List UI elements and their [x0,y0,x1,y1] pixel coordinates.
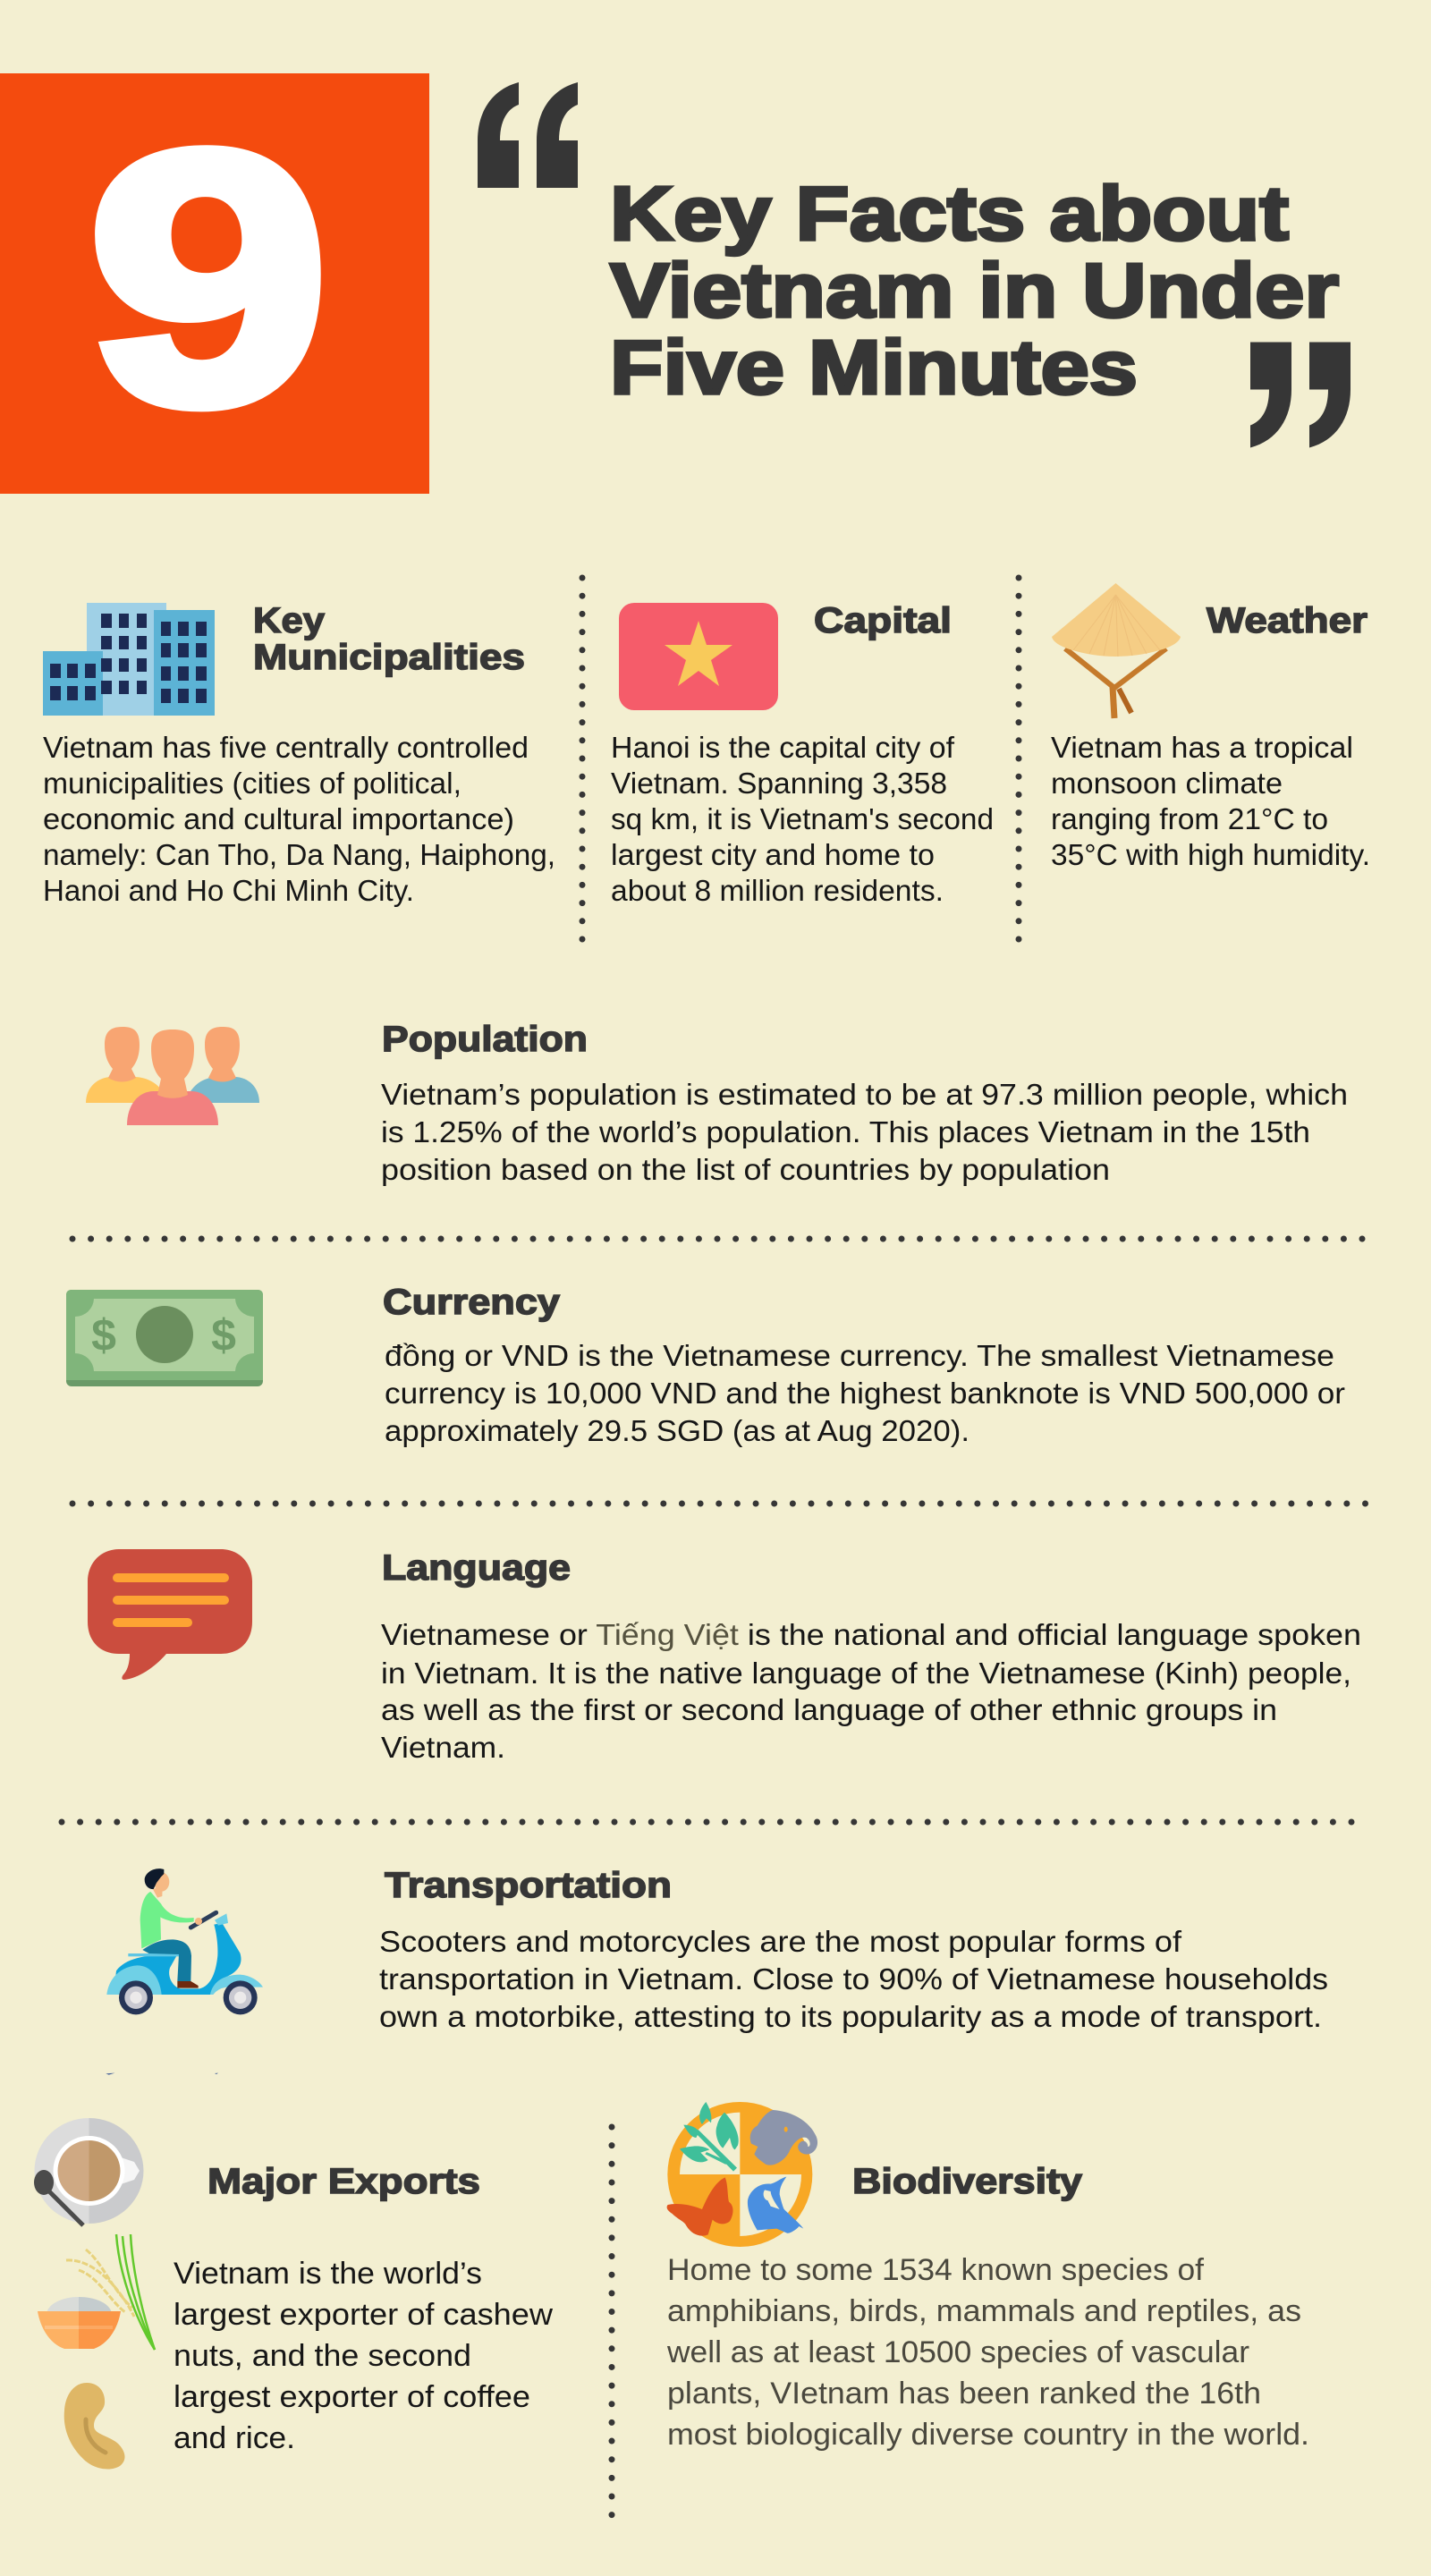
text: municipalities body: Vietnam has five centrally controlled [43,731,529,764]
icon: plant [680,2102,739,2172]
text: language body: Vietnam. [381,1731,505,1764]
text: exports body: largest exporter of cashew [174,2298,553,2332]
icon: dollar signs: $ [211,1310,236,1360]
icon: dollar signs: $ [91,1310,116,1360]
title: Five Minutes [610,326,1138,411]
icon: opening quote mark [478,82,578,188]
icon: closing quote mark [1250,342,1351,447]
text: transportation body: transportation in Vietnam. Close to 90% of Vietnamese households [379,1962,1328,1996]
text: exports body: Vietnam is the world’s [174,2257,482,2291]
panel: number nine block [0,73,429,494]
icon: banknote [66,1290,263,1386]
icon: butterfly [667,2177,733,2236]
panel: number nine block: 9 [88,79,329,479]
icon: rice bowl [38,2234,155,2350]
icon: Vietnam flag [619,603,778,710]
panel: weather [1051,583,1370,871]
text: municipalities body: economic and cultural importance) [43,802,514,835]
text: population body [381,1078,1348,1186]
title: Vietnam in Under [610,249,1339,334]
text: weather body: 35°C with high humidity. [1051,838,1370,871]
title [610,172,1339,411]
text: currency body: đồng or VND is the Vietnamese currency. The smallest Vietnamese [385,1339,1334,1372]
heading: key municipalities [253,601,525,677]
heading: transportation: Transportation [385,1866,672,1905]
heading: capital: Capital [814,601,952,640]
text: population body: is 1.25% of the world’s population. This places Vietnam in the 15th [381,1115,1310,1148]
panel: major exports [34,2118,553,2469]
text: transportation body: Scooters and motorcycles are the most popular forms of [379,1925,1182,1958]
text: exports body: nuts, and the second [174,2339,471,2373]
icon: speech bubble [88,1549,252,1680]
heading: language: Language [382,1548,571,1588]
text: biodiversity body: amphibians, birds, mammals and reptiles, as [667,2294,1301,2328]
icon: dolphin [748,2177,803,2233]
heading: population: Population [382,1020,588,1059]
icon: people [86,1027,259,1125]
text: transportation body: own a motorbike, attesting to its popularity as a mode of transport. [379,2000,1322,2033]
heading: key municipalities: Key [253,601,326,640]
icon: cashew [64,2383,125,2469]
text: biodiversity body: most biologically diverse country in the world. [667,2418,1309,2452]
heading: key municipalities: Municipalities [253,638,525,677]
heading: major exports: Major Exports [207,2162,480,2201]
text: municipalities body: municipalities (cities of political, [43,767,461,800]
text: population body: position based on the list of countries by population [381,1153,1110,1186]
text: weather body: monsoon climate [1051,767,1283,800]
title: Key Facts about [610,172,1289,257]
panel: currency [66,1283,1345,1447]
text: currency body: approximately 29.5 SGD (as at Aug 2020). [385,1414,970,1447]
heading: currency: Currency [383,1283,561,1322]
panel: population [86,1020,1348,1186]
text: municipalities body [43,731,555,907]
text: weather body: ranging from 21°C to [1051,802,1328,835]
text: exports body [174,2257,553,2455]
text: capital body: Hanoi is the capital city of [611,731,955,764]
panel: language [88,1548,1361,1764]
text: transportation body [379,1925,1328,2033]
icon: conical hat [1052,583,1181,718]
heading: biodiversity: Biodiversity [852,2162,1083,2201]
icon: coffee cup [34,2118,143,2225]
text: capital body: sq km, it is Vietnam's second [611,802,994,835]
text: biodiversity body: Home to some 1534 known species of [667,2253,1205,2287]
heading: weather: Weather [1207,601,1367,640]
text: biodiversity body: plants, VIetnam has been ranked the 16th [667,2377,1261,2411]
text: municipalities body: Hanoi and Ho Chi Minh City. [43,874,414,907]
panel: capital [611,601,994,907]
text: biodiversity body [666,2253,1309,2452]
text: municipalities body: namely: Can Tho, Da Nang, Haiphong, [43,838,555,871]
icon: elephant [750,2110,817,2165]
text: capital body: largest city and home to [611,838,935,871]
text: population body: Vietnam’s population is estimated to be at 97.3 million people, which [381,1078,1348,1111]
text: language body: Vietnamese or Tiếng Việt is the national and official language spoken [381,1618,1361,1651]
icon: scooter rider [106,1868,263,2075]
text: weather body [1051,731,1370,871]
text: capital body: Vietnam. Spanning 3,358 [611,767,947,800]
text: biodiversity body: well as at least 10500 species of vascular [666,2335,1249,2369]
icon: biodiversity emblem [667,2102,817,2247]
text: language body: in Vietnam. It is the native language of the Vietnamese (Kinh) people, [381,1657,1351,1690]
text: language body: as well as the first or second language of other ethnic groups in [381,1693,1277,1726]
text: currency body: currency is 10,000 VND and the highest banknote is VND 500,000 or [385,1377,1345,1410]
panel: transportation [106,1866,1328,2075]
text: capital body: about 8 million residents. [611,874,944,907]
text: weather body: Vietnam has a tropical [1051,731,1353,764]
text: capital body [611,731,994,907]
text: currency body [385,1339,1345,1447]
text: language body [381,1618,1361,1764]
panel: key municipalities [43,601,555,907]
text: exports body: and rice. [174,2421,295,2455]
icon: buildings [43,603,215,716]
text: exports body: largest exporter of coffee [174,2380,530,2414]
panel: biodiversity [666,2102,1309,2452]
icon: dollar signs [91,1310,236,1360]
